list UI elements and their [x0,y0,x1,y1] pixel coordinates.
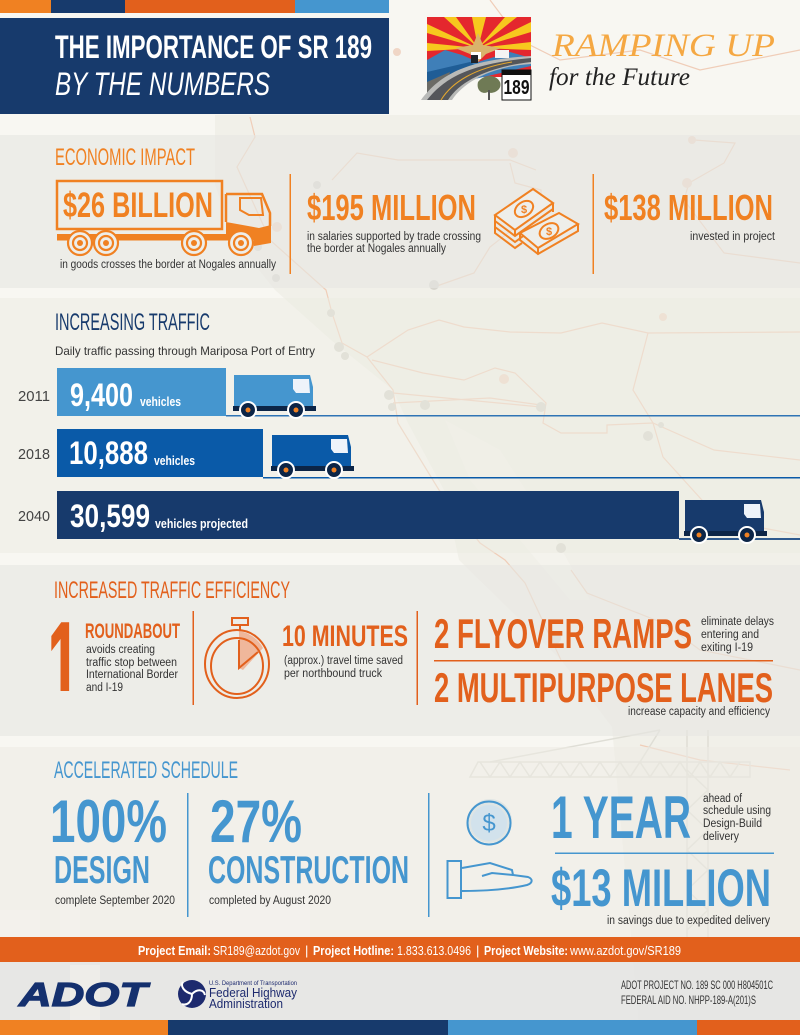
logo: SR 189 Arizona flag scene [421,17,531,100]
icon: stacks of money: $ [521,204,527,216]
stat: 27% construction: CONSTRUCTION [208,849,409,892]
bar chart row: 2011: 9,400 [70,377,133,413]
bar chart row: 2018 [18,429,800,478]
background map [215,0,800,1035]
contact bar: 1.833.613.0496 [397,943,471,958]
panel: accelerated schedule [50,757,774,927]
stat: 100% design: 100% [50,788,167,855]
logo: Federal Highway Administration: Federal Highway [209,986,298,1000]
bar chart row: 2011: vehicles [140,394,181,409]
stat: 1 roundabout [51,622,180,691]
stat: 1 roundabout: International Border [86,669,178,681]
route 189 shield: 189 [504,77,530,99]
stat: 1 year: 1 YEAR [551,784,691,851]
stat: 10 minutes: (approx.) travel time saved [284,655,403,667]
contact bar: www.azdot.gov/SR189 [569,943,681,958]
stat: 27% construction: completed by August 2020 [209,895,331,907]
stat: $13 million: in savings due to expedited delivery [607,915,770,927]
stat: $195 million: in salaries supported by trade crossing [307,231,481,243]
tagline [549,28,775,91]
bottom colour stripe [0,1020,800,1035]
title panel [0,18,389,114]
bar chart row: 2018: 10,888 [69,435,148,471]
logo: Federal Highway Administration: U.S. Department of Transportation [209,980,297,987]
stat: $195 million: $195 MILLION [307,187,476,228]
panel: increased traffic efficiency [51,581,774,718]
panel: economic impact [55,144,776,274]
bar chart row: 2018: vehicles [154,453,195,468]
contact bar: Project Email: [138,943,211,958]
title line 1: THE IMPORTANCE OF SR 189 [55,29,372,65]
stat: 1 year: Design-Build [703,818,762,830]
stat: 2 flyover ramps: eliminate delays [701,616,774,628]
heading: INCREASED TRAFFIC EFFICIENCY [54,577,290,604]
stat: 2 flyover ramps: exiting I-19 [701,642,753,654]
contact bar: Project Website: [484,943,568,958]
top colour stripe [0,0,389,13]
logo: ADOT: ADOT [18,976,151,1013]
stat: 1 year: ahead of [703,793,743,805]
tagline: for the Future [549,64,690,91]
contact bar: | [476,943,479,958]
bar chart row: 2011: 2011 [18,388,50,405]
icon: van 2011 [233,375,316,418]
stat: $138 million [604,187,776,243]
contact bar: SR189@azdot.gov [213,943,300,958]
contact bar: Project Hotline: [313,943,394,958]
stat: 100% design [50,788,175,907]
bar chart row: 2018: 2018 [18,446,50,463]
bar chart row: 2040: vehicles projected [155,516,248,531]
stat: 10 minutes: per northbound truck [284,668,382,680]
title line 2: BY THE NUMBERS [55,66,270,102]
stat: 1 year: schedule using [703,805,771,817]
stat: 2 multipurpose lanes: increase capacity and efficiency [628,706,770,718]
stat: 10 minutes: 10 MINUTES [282,620,408,653]
crane [470,730,750,937]
stat: $195 million: the border at Nogales annually [307,243,446,255]
logo: Federal Highway Administration: Administration [209,997,283,1011]
caption: in goods crosses the border at Nogales annually [60,259,276,271]
contact bar: | [305,943,308,958]
stat: 27% construction [208,788,409,907]
bar chart row: 2040: 2040 [18,508,50,525]
heading: ACCELERATED SCHEDULE [54,757,238,784]
tagline: RAMPING UP [551,28,775,64]
stat: $195 million [307,187,481,255]
stat: 100% design: DESIGN [54,849,150,892]
logo: Federal Highway Administration [178,980,298,1011]
stat: 1 roundabout: 1 [48,598,79,731]
heading: INCREASING TRAFFIC [55,309,210,336]
stat: 10 minutes [282,620,408,680]
icon: truck with $26 billion [57,181,271,255]
bar chart row: 2040 [18,491,800,543]
stat: 1 year: delivery [703,831,739,843]
bar chart row: 2040: 30,599 [70,498,150,534]
heading: ECONOMIC IMPACT [55,144,195,171]
stat: 1 roundabout: traffic stop between [86,657,177,669]
stat: 1 roundabout: ROUNDABOUT [85,620,180,643]
contact bar [0,937,800,962]
stat: 2 flyover ramps: entering and [701,629,759,641]
stat: $138 million: invested in project [690,231,776,243]
icon: dollar coin over hand: $ [482,810,496,837]
stat: 100% design: complete September 2020 [55,895,175,907]
stat: 1 roundabout: avoids creating [86,644,155,656]
icon: stacks of money [495,189,578,254]
bar chart row: 2011 [18,368,800,418]
icon: van 2018 [271,435,354,478]
panel: increasing traffic [18,309,800,543]
project numbers [621,978,773,1007]
subtitle: Daily traffic passing through Mariposa Port of Entry [55,344,315,358]
icon: stopwatch [205,618,269,698]
stat: 1 roundabout: and I-19 [86,682,123,694]
icon: truck with $26 billion: $26 BILLION [63,186,213,225]
stat: 27% construction: 27% [210,788,302,855]
icon: dollar coin over hand [448,799,532,898]
icon: van 2040 [684,500,767,543]
icon: stacks of money: $ [546,226,552,238]
